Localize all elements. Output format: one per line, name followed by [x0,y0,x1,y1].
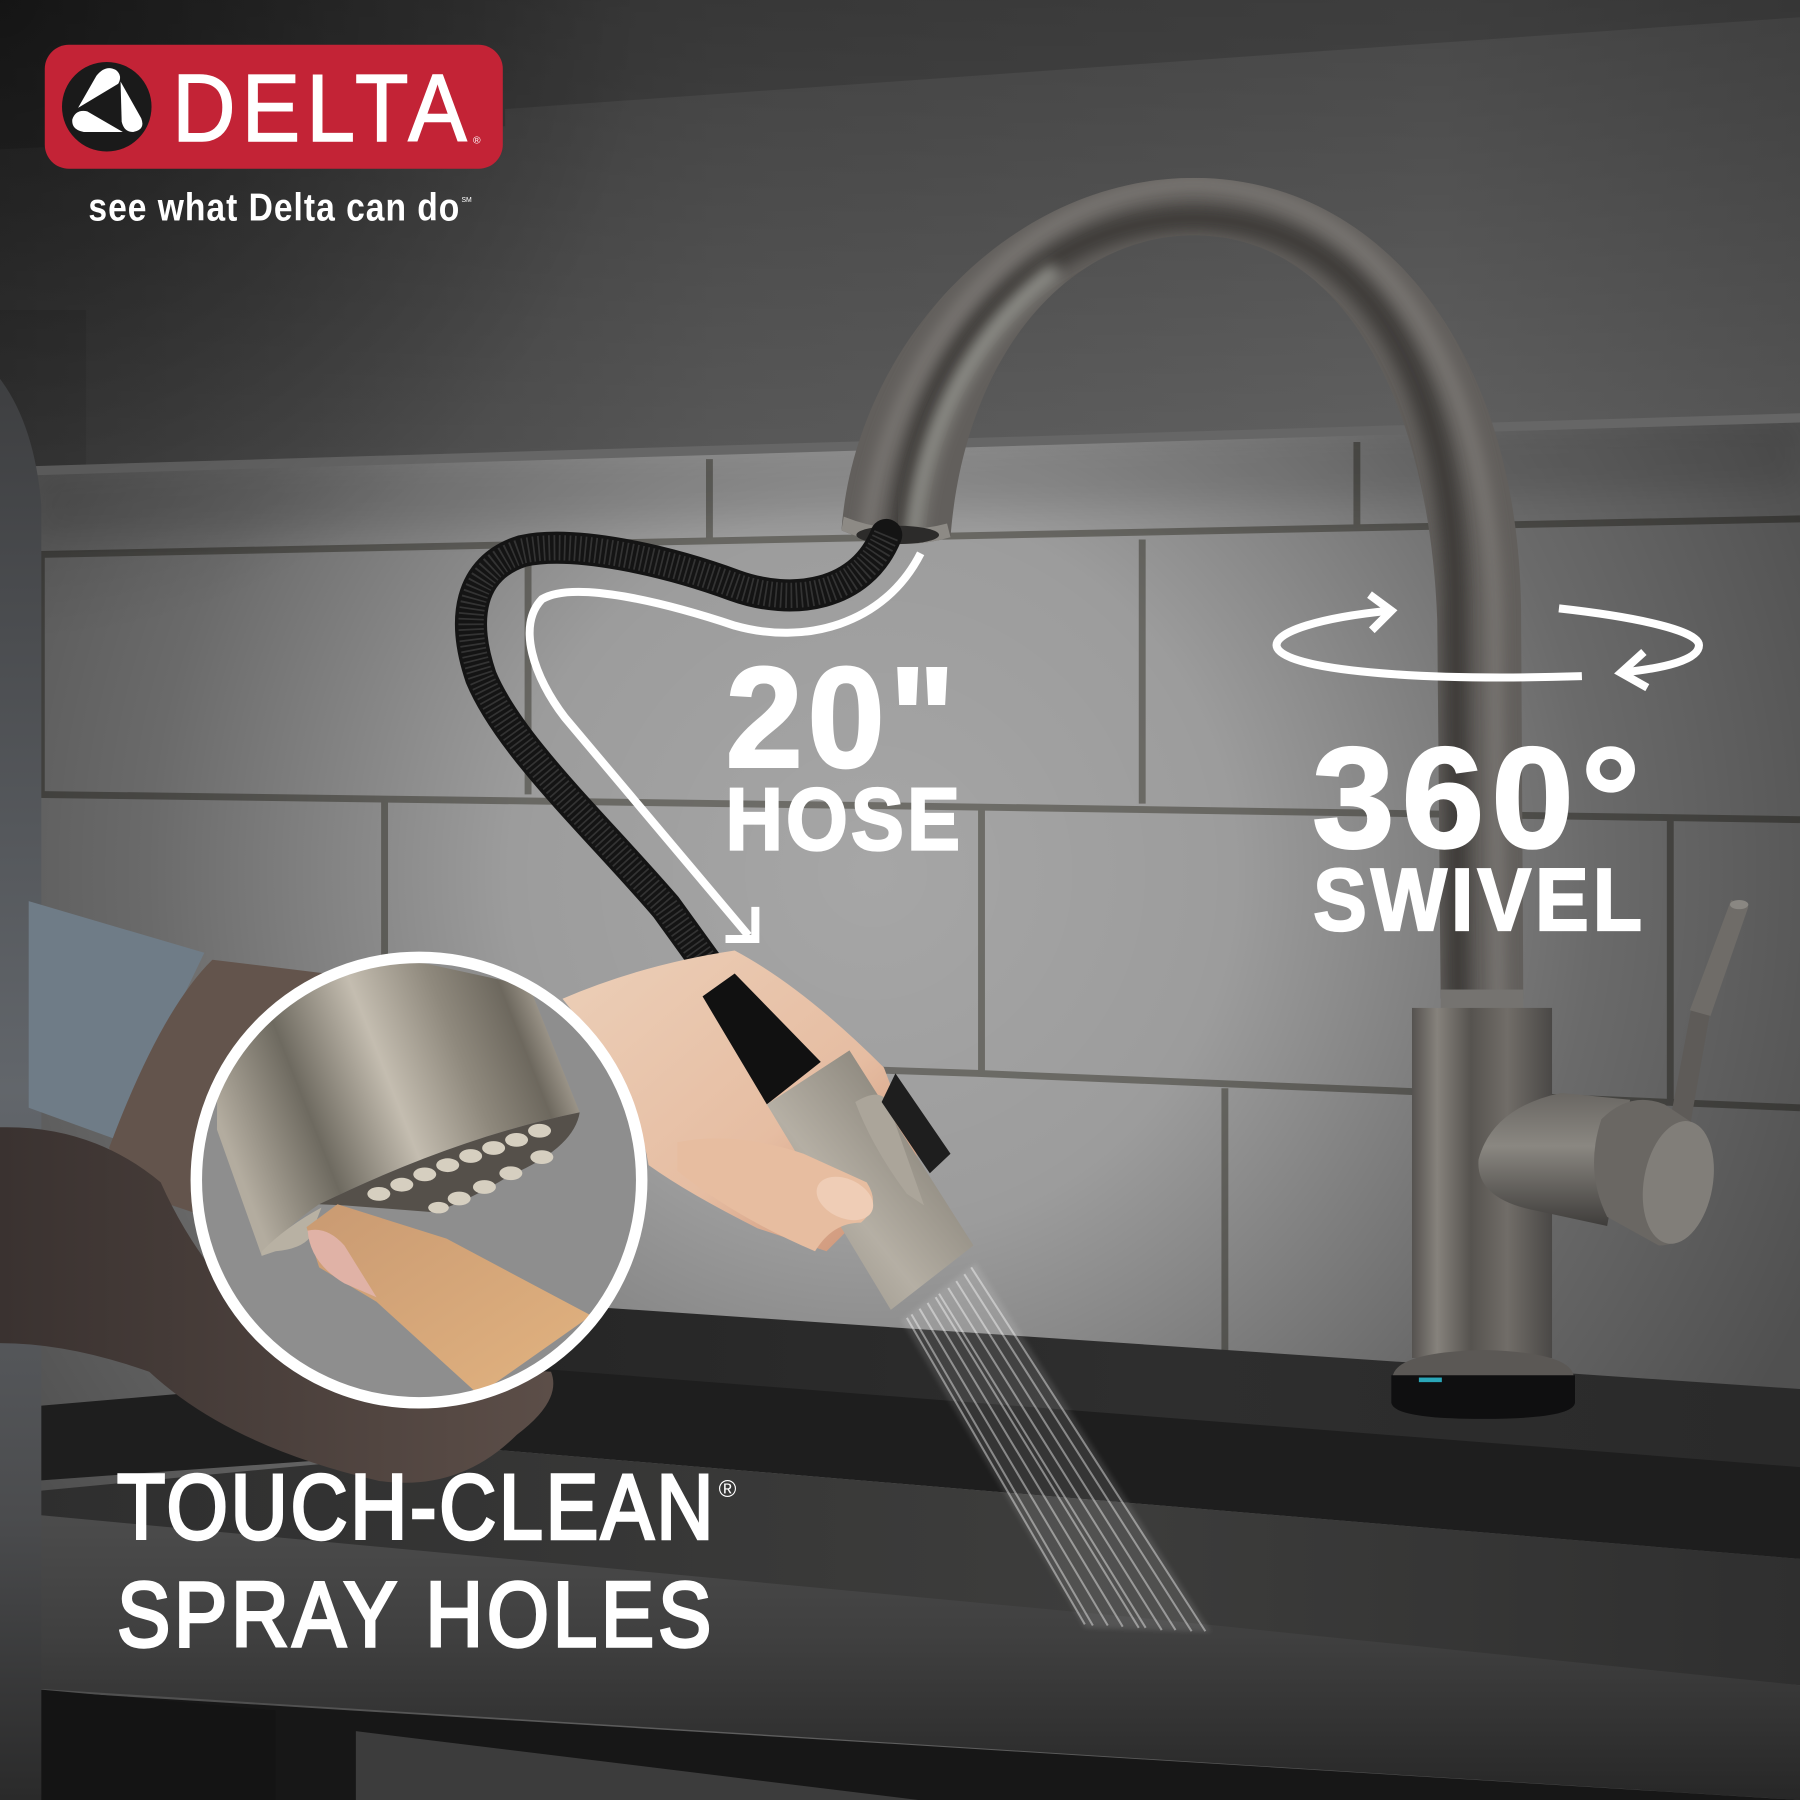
spray button [882,1073,951,1173]
left edge strip [0,379,41,1800]
faucet flange [1392,1350,1574,1378]
lever handle [1670,900,1748,1127]
sprayer collar [703,973,821,1104]
tile grout [34,442,1800,1355]
faucet neck ring [1441,990,1523,1008]
left hand and forearm [0,960,553,1483]
spout outlet [841,517,951,544]
fingers [677,1138,873,1251]
sprayer face cylinder [217,963,580,1256]
sprayer head [767,1050,973,1310]
handle cylinder [1478,1093,1630,1226]
hose word: HOSE [726,769,963,868]
handle cap [1594,1100,1713,1246]
registered mark: ® [473,135,481,146]
sleeve [29,901,204,1142]
countertop and sink [17,1304,1800,1800]
swivel arrows [1277,595,1699,688]
braided hose [471,535,886,990]
inset circle: touch-clean spray holes [196,918,642,1403]
spray holes [367,1124,553,1213]
Delta logo [45,45,503,229]
shadow under cabinet [34,419,1800,540]
spray face [319,1112,580,1212]
tagline: see what Delta can do [88,186,460,229]
touch base [1391,1375,1575,1419]
logo wordmark: DELTA [172,56,473,162]
360 degree swivel label [1312,718,1647,949]
water spray [901,1263,1211,1632]
service mark: SM [461,197,472,204]
touch-clean spray holes label [117,1456,737,1666]
right hand holding sprayer [562,951,973,1310]
logo mark [62,62,152,152]
logo badge [45,45,503,169]
20 inch number: 20" [726,638,960,798]
touch-clean line: TOUCH-CLEAN [117,1456,716,1558]
nozzle rim [262,1208,321,1256]
360 degree number: 360° [1312,718,1647,878]
swivel word: SWIVEL [1313,850,1646,949]
finger [307,1204,591,1395]
spray holes line: SPRAY HOLES [117,1564,715,1666]
upper cabinet [0,0,1800,473]
faucet spout [842,178,1524,998]
20 inch hose label [726,638,963,868]
fingernail [810,1168,880,1229]
finger nail [308,1230,377,1297]
back of hand [562,951,918,1251]
registered mark: ® [719,1476,737,1503]
faucet body [1412,1008,1552,1358]
hose length arrow [530,553,921,939]
faucet [804,161,1748,1419]
